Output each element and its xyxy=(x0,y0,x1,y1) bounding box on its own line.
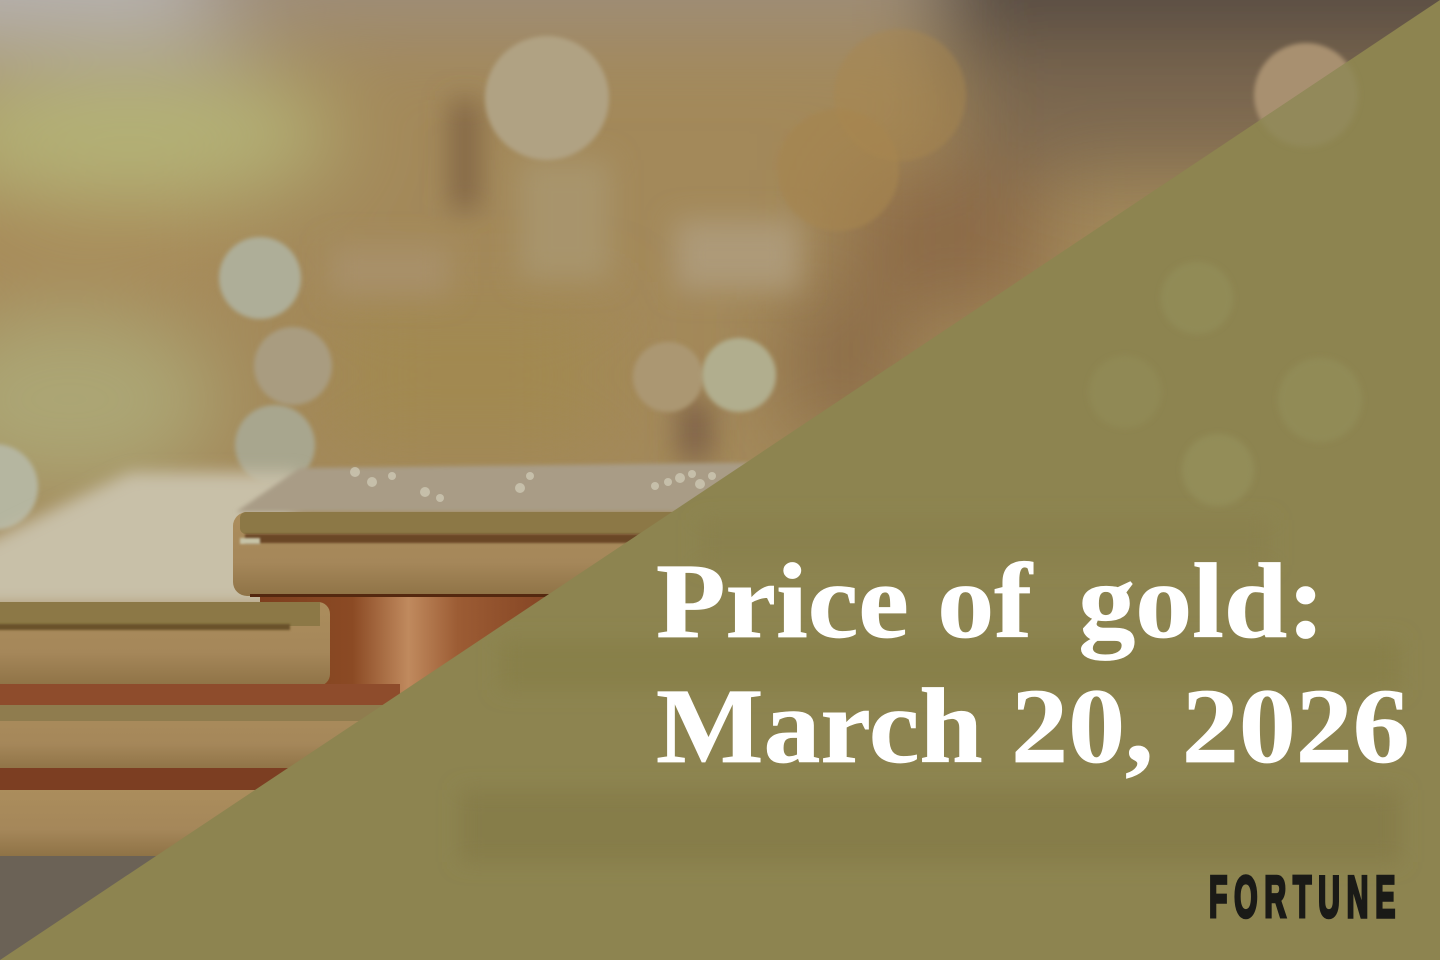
bokeh lights xyxy=(0,29,1358,530)
logo: Fortune wordmark: FORTUNE xyxy=(1209,865,1402,930)
title xyxy=(656,543,1410,786)
table surface xyxy=(0,856,480,960)
upper bar xyxy=(233,512,793,596)
title: Price of gold: xyxy=(656,543,1325,661)
top face of upper bar xyxy=(236,462,800,512)
second bar xyxy=(0,602,330,686)
title: March 20, 2026 xyxy=(656,668,1410,786)
third bar xyxy=(0,705,400,770)
gold bar stack xyxy=(0,462,800,960)
cloth highlight xyxy=(0,472,300,606)
copper reflection xyxy=(260,594,590,706)
fourth bar xyxy=(0,790,400,856)
soft out-of-focus patches xyxy=(330,100,800,460)
